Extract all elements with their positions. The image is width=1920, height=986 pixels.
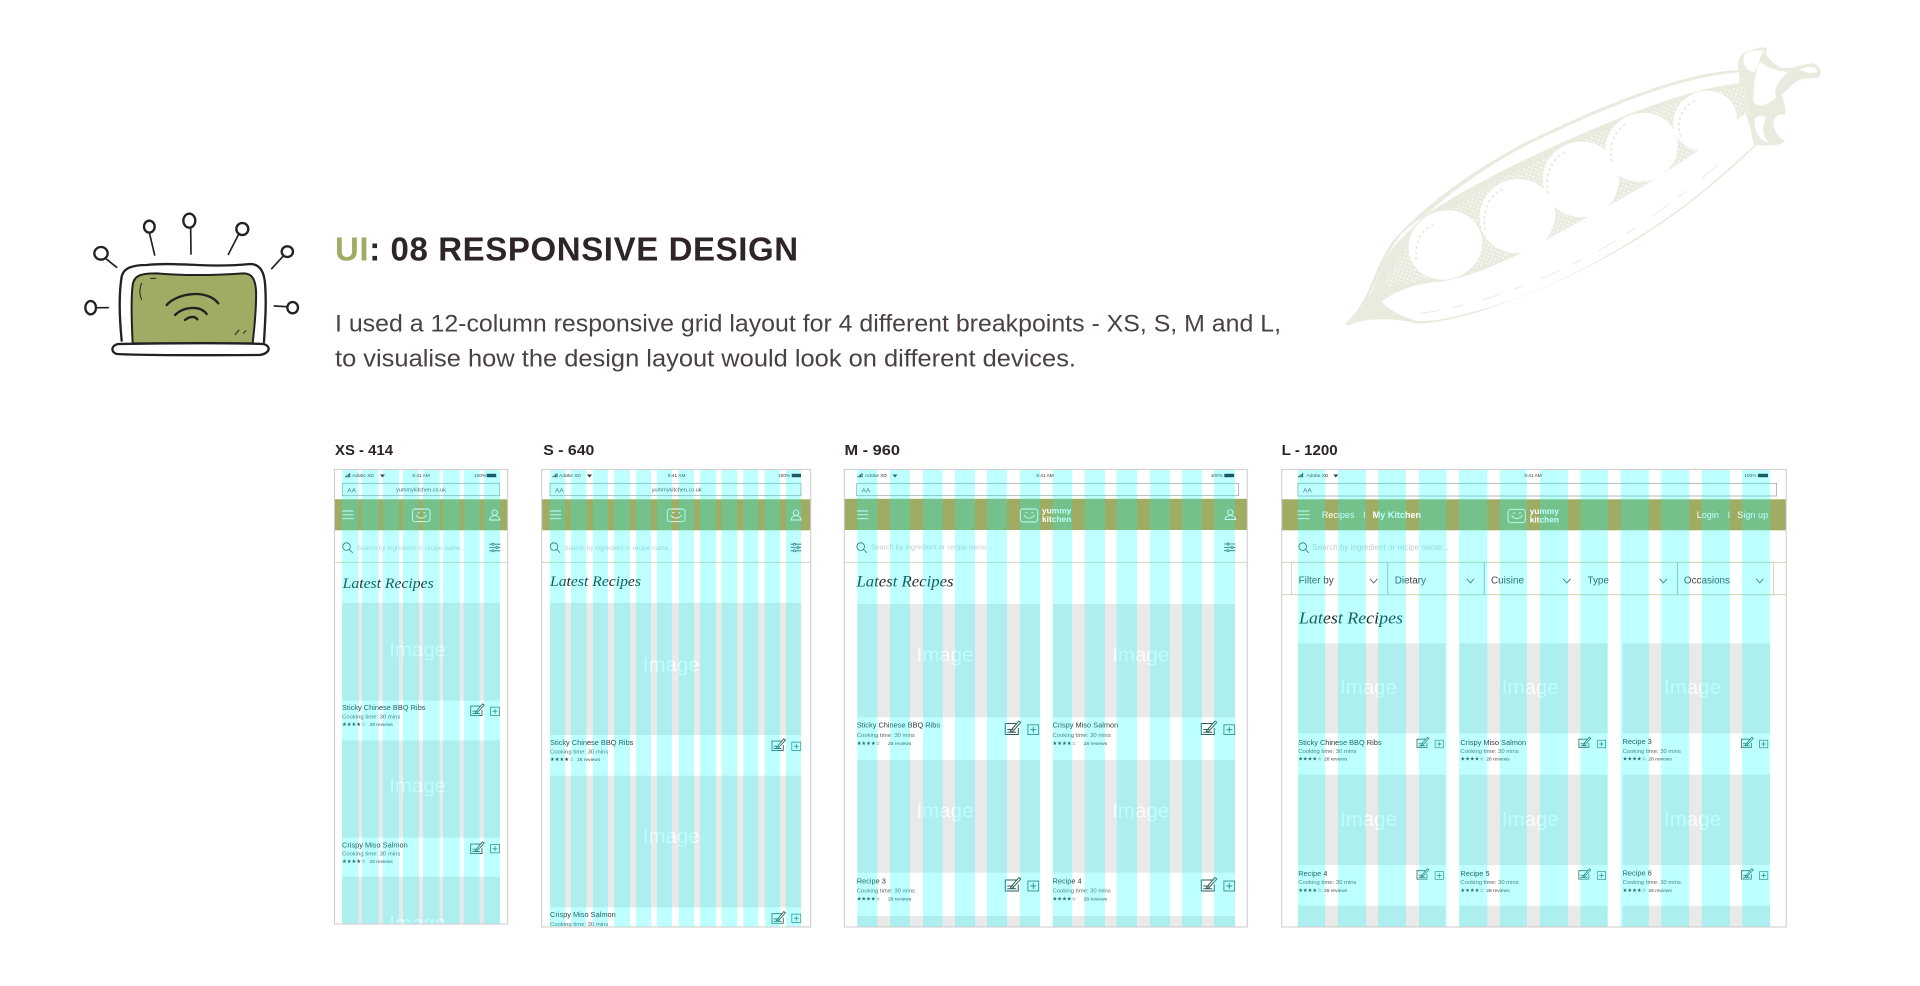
L wireframe content: Sign up — [1737, 510, 1768, 520]
S wireframe content: 28 reviews — [577, 757, 601, 763]
S wireframe content: 100% — [778, 473, 791, 479]
XS wireframe content: Image — [389, 639, 446, 662]
M wireframe content: Recipe 4 — [1052, 876, 1082, 885]
M wireframe content: 28 reviews — [1084, 741, 1108, 747]
L wireframe content: Search by ingredient or recipe name... — [1312, 543, 1448, 552]
M wireframe content: Search by ingredient or recipe name... — [871, 542, 993, 551]
L wireframe content: 28 reviews — [1648, 757, 1672, 763]
S wireframe content: Cooking time: 30 mins — [550, 922, 608, 928]
S wireframe content: Crispy Miso Salmon — [550, 910, 616, 919]
L wireframe content: Cuisine — [1491, 576, 1524, 587]
S wireframe content: Cooking time: 30 mins — [550, 750, 608, 756]
panel: XS breakpoint — [334, 442, 508, 935]
panel: L breakpoint — [1282, 442, 1786, 927]
M wireframe content: 100% — [1211, 473, 1224, 479]
M wireframe content: yummy — [1042, 505, 1072, 515]
XS wireframe content: ★★★★☆ — [342, 722, 366, 728]
L wireframe content: 9:41 AM — [1524, 473, 1542, 479]
L wireframe content: Type — [1588, 576, 1609, 587]
XS wireframe content: Image — [389, 912, 446, 935]
L wireframe content: Dietary — [1395, 576, 1426, 587]
M wireframe content: Cooking time: 30 mins — [857, 733, 915, 739]
XS wireframe content: Cooking time: 30 mins — [342, 714, 400, 720]
icon: laptop with pins and wifi — [85, 214, 298, 355]
L wireframe content: Adobe XD — [1306, 473, 1329, 479]
L wireframe content: Sticky Chinese BBQ Ribs — [1298, 738, 1382, 747]
L wireframe content: Occasions — [1684, 576, 1730, 587]
L wireframe content: Recipe 6 — [1623, 868, 1652, 877]
S wireframe content: 9:41 AM — [668, 473, 686, 479]
panel: S breakpoint — [542, 442, 811, 928]
heading: M - 960: M - 960 — [844, 442, 900, 459]
L wireframe content: ★★★★☆ — [1623, 757, 1647, 763]
M wireframe content: 28 reviews — [1084, 896, 1108, 902]
M wireframe content — [844, 473, 1247, 927]
XS wireframe content: yummykitchen.co.uk — [396, 488, 446, 494]
XS wireframe content: 100% — [474, 473, 487, 479]
M wireframe content: 28 reviews — [888, 896, 912, 902]
XS wireframe content: ★★★★☆ — [342, 859, 366, 865]
L wireframe content: Image — [1502, 676, 1559, 699]
M wireframe content: Cooking time: 30 mins — [1052, 888, 1111, 894]
L wireframe content: Cooking time: 30 mins — [1298, 749, 1357, 755]
heading: S - 640: S - 640 — [543, 442, 594, 459]
L wireframe content: 28 reviews — [1324, 888, 1348, 894]
title: UI: 08 RESPONSIVE DESIGN — [335, 230, 799, 268]
heading: XS - 414: XS - 414 — [335, 442, 394, 459]
XS wireframe content: Adobe XD — [352, 473, 374, 479]
M wireframe content: ★★★★☆ — [857, 741, 881, 747]
XS wireframe content: Image — [389, 775, 446, 798]
L wireframe content: AA — [1303, 488, 1312, 494]
L wireframe content: Image — [1664, 676, 1721, 699]
M wireframe content: kitchen — [1042, 514, 1071, 524]
M wireframe content: Latest Recipes — [855, 574, 954, 591]
S wireframe content: Adobe XD — [559, 473, 581, 479]
XS wireframe content: Search by ingredient or recipe name... — [357, 545, 466, 552]
L wireframe content: ★★★★☆ — [1298, 757, 1322, 763]
M wireframe content: Crispy Miso Salmon — [1052, 721, 1118, 730]
L wireframe content: Image — [1340, 676, 1397, 699]
L wireframe content: yummy — [1530, 506, 1559, 516]
intro text: I used a 12-column responsive grid layout for 4 different breakpoints - XS, S, M and L, — [335, 310, 1281, 338]
L wireframe content: Cooking time: 30 mins — [1623, 749, 1681, 755]
L wireframe content: 28 reviews — [1486, 757, 1510, 763]
M wireframe content: Image — [1112, 644, 1169, 667]
XS wireframe content: 28 reviews — [370, 859, 393, 865]
M wireframe content: Sticky Chinese BBQ Ribs — [857, 721, 940, 730]
L wireframe content: ★★★★☆ — [1460, 757, 1484, 763]
M wireframe content: 9:41 AM — [1036, 473, 1054, 479]
S wireframe content: AA — [555, 487, 564, 494]
S wireframe content: Sticky Chinese BBQ Ribs — [550, 738, 634, 747]
S wireframe content: Search by ingredient or recipe name... — [564, 545, 674, 552]
S wireframe content: ★★★★☆ — [550, 757, 574, 763]
L wireframe content: 100% — [1744, 473, 1757, 479]
L wireframe content: My Kitchen — [1373, 510, 1421, 520]
M wireframe content: Recipe 3 — [857, 876, 886, 885]
intro text: to visualise how the design layout would look on different devices. — [335, 346, 1076, 372]
L wireframe content: 28 reviews — [1324, 757, 1348, 763]
L wireframe content: Image — [1664, 808, 1721, 831]
L wireframe content: Cooking time: 30 mins — [1460, 749, 1519, 755]
M grid columns — [857, 470, 1235, 927]
S wireframe content: Latest Recipes — [549, 574, 641, 590]
S grid columns — [550, 470, 801, 927]
S wireframe content — [542, 473, 811, 928]
L wireframe content: Image — [1340, 808, 1397, 831]
M wireframe content: AA — [862, 487, 871, 494]
M wireframe content: Adobe XD — [865, 473, 887, 479]
L wireframe content: Crispy Miso Salmon — [1460, 738, 1526, 747]
S wireframe content: Image — [643, 825, 700, 848]
L wireframe content: Cooking time: 30 mins — [1298, 880, 1357, 886]
L wireframe content: I — [1363, 510, 1366, 520]
L wireframe content: Image — [1502, 808, 1559, 831]
M wireframe content: Cooking time: 30 mins — [857, 888, 915, 894]
panel: M breakpoint — [844, 442, 1247, 927]
L wireframe content — [1282, 473, 1786, 927]
L wireframe content: Recipe 3 — [1623, 737, 1652, 746]
M wireframe content: 28 reviews — [888, 741, 912, 747]
L wireframe content: Cooking time: 30 mins — [1623, 880, 1681, 886]
M wireframe content: Cooking time: 30 mins — [1052, 733, 1111, 739]
M wireframe content: ★★★★☆ — [1052, 741, 1076, 747]
M wireframe content: Image — [1112, 800, 1169, 822]
S wireframe content: yummykitchen.co.uk — [652, 488, 702, 494]
L wireframe content: Recipes — [1322, 510, 1355, 520]
L wireframe content: Filter by — [1299, 576, 1334, 587]
L wireframe content: ★★★★☆ — [1298, 888, 1322, 894]
L wireframe content: Recipe 5 — [1460, 869, 1490, 878]
XS grid columns — [342, 470, 500, 924]
M wireframe content: Image — [917, 800, 973, 822]
L wireframe content: ★★★★☆ — [1623, 888, 1647, 894]
L grid columns — [1298, 470, 1770, 927]
L wireframe content: Cooking time: 30 mins — [1460, 880, 1519, 886]
L wireframe content: Recipe 4 — [1298, 869, 1327, 878]
L wireframe content: Latest Recipes — [1298, 608, 1403, 627]
M wireframe content: ★★★★☆ — [857, 896, 881, 902]
intro text — [335, 310, 1281, 372]
L wireframe content: kitchen — [1530, 514, 1559, 524]
heading: L - 1200: L - 1200 — [1282, 442, 1338, 459]
XS wireframe content: Cooking time: 30 mins — [342, 851, 400, 857]
XS wireframe content: Sticky Chinese BBQ Ribs — [342, 703, 426, 712]
XS wireframe content: 9:41 AM — [412, 473, 430, 479]
XS wireframe content: Crispy Miso Salmon — [342, 841, 408, 850]
S wireframe content: Image — [643, 654, 700, 676]
L wireframe content: ★★★★☆ — [1460, 888, 1484, 894]
background pea pod illustration — [1345, 48, 1820, 325]
XS wireframe content — [334, 473, 508, 935]
XS wireframe content: Latest Recipes — [342, 576, 434, 592]
XS wireframe content: AA — [347, 487, 357, 494]
M wireframe content: Image — [917, 644, 973, 667]
L wireframe content: 28 reviews — [1486, 888, 1510, 894]
L wireframe content: 28 reviews — [1648, 888, 1672, 894]
L wireframe content: I — [1728, 510, 1730, 520]
L wireframe content: Login — [1697, 510, 1719, 520]
XS wireframe content: 28 reviews — [370, 722, 393, 728]
M wireframe content: ★★★★☆ — [1052, 896, 1076, 902]
